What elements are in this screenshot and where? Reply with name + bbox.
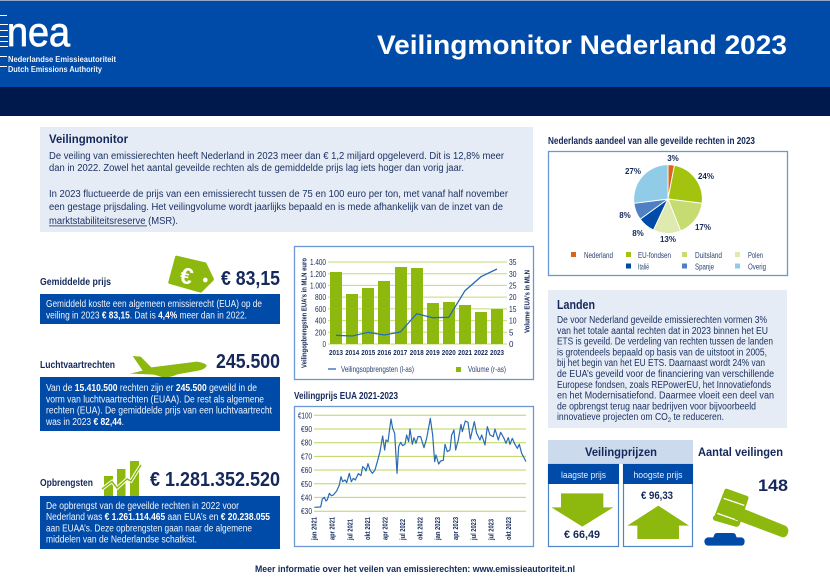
text box: Gemiddeld kostte een algemeen emissierecht (EUA) op de <box>46 299 262 310</box>
heading: Landen: Landen <box>557 298 595 312</box>
right axis labels: 30 <box>509 270 517 279</box>
text box: aan EUAA’s. Deze opbrengsten gaan naar de algemene <box>46 524 252 534</box>
pie legend: EU-fondsen <box>638 250 671 260</box>
pie legend: Overig <box>748 262 766 272</box>
Landen text: van het totale aantal rechten dat in 2023 binnen het EU <box>557 326 768 337</box>
Landen text: te reduceren. <box>671 412 724 423</box>
Landen text: de EUA’s geveild voor de financiering van verschillende <box>557 369 774 380</box>
text box: De opbrengst van de geveilde rechten in 2022 voor <box>46 501 240 512</box>
date labels: okt 2023 <box>506 517 513 540</box>
line chart: veilingprijs EUA: €50 <box>301 480 312 489</box>
year labels: 2015 <box>361 348 375 357</box>
year labels <box>329 348 504 357</box>
value: 148: 148 <box>758 476 788 495</box>
left axis labels: 800 <box>315 293 326 302</box>
Landen text: Europese fondsen, zoals REPowerEU, het Innovatiefonds <box>557 380 771 391</box>
left axis labels: 1.200 <box>310 270 326 279</box>
right axis labels: 15 <box>509 305 517 314</box>
Landen text: ETS is geveild. De verdeling van rechten tussen de landen <box>557 336 773 348</box>
line chart: veilingprijs EUA <box>294 406 534 546</box>
year labels: 2019 <box>426 348 440 357</box>
Landen text: innovatieve projecten om CO <box>557 412 686 423</box>
date labels: jul 2022 <box>400 519 407 541</box>
line chart: veilingprijs EUA: €80 <box>301 439 312 448</box>
year labels: 2014 <box>345 348 360 357</box>
text box <box>40 294 280 324</box>
right axis labels: 10 <box>509 316 517 326</box>
pie percentages <box>619 154 714 244</box>
date labels: apr 2021 <box>330 517 336 540</box>
intro text: een gestage prijsdaling. Het veilingvolume wordt jaarlijks bepaald en is mede afhankelijk van de inzet van de <box>49 202 503 213</box>
Landen text: en het Modernisatiefond. Daarmee vloeit een deel van <box>557 390 774 402</box>
left axis labels: 0 <box>322 340 326 349</box>
volume bars <box>330 267 503 344</box>
lowest price: € 66,49 <box>564 529 600 541</box>
line chart: veilingprijs EUA: €40 <box>301 494 312 502</box>
header banner <box>0 0 830 116</box>
card: laagste prijs <box>548 464 619 546</box>
icon: up arrow <box>627 506 689 539</box>
year labels: 2022 <box>474 348 488 357</box>
panel: Landen <box>548 290 787 428</box>
text box <box>40 496 280 549</box>
intro text <box>49 151 509 227</box>
icon: price tag <box>170 257 212 291</box>
right axis labels <box>509 258 517 349</box>
right axis labels: 25 <box>509 282 517 290</box>
value: € 1.281.352.520 <box>150 469 280 491</box>
pie percentages: 27% <box>625 167 641 176</box>
left axis labels: 200 <box>315 328 326 338</box>
text box: Nederland was € 1.261.114.465 aan EUA’s en € 20.238.055 <box>46 512 270 523</box>
pie percentages: 8% <box>632 229 644 238</box>
card: hoogste prijs <box>623 464 693 546</box>
right axis labels: 0 <box>509 340 514 349</box>
date labels: jul 2021 <box>348 519 354 541</box>
Landen text: De voor Nederland geveilde emissierechten vormen 3% <box>557 315 767 326</box>
pie legend: Polen <box>748 250 763 260</box>
bar and line chart: veilingopbrengsten and volume <box>294 246 534 380</box>
text box: veiling in 2023 € 83,15. Dat is 4,4% meer dan in 2022. <box>46 310 247 322</box>
pie percentages: 24% <box>698 172 714 181</box>
logo: NEa <box>0 9 116 74</box>
Landen text: 2 <box>668 417 671 424</box>
heading: Veilingprijs EUA: Veilingprijs EUA 2021-2023 <box>294 391 398 402</box>
panel: Veilingprijzen <box>548 440 693 546</box>
pie percentages: 8% <box>619 211 631 220</box>
text box <box>40 377 280 431</box>
right axis title: Volume EUA’s in MLN <box>522 270 532 333</box>
year labels: 2023 <box>490 348 504 357</box>
date labels: okt 2022 <box>418 517 424 540</box>
right axis labels: 35 <box>509 258 517 267</box>
value: 245.500 <box>216 351 280 373</box>
icon: down arrow <box>551 493 613 527</box>
right axis labels: 20 <box>509 293 517 302</box>
right axis labels: 5 <box>509 328 514 338</box>
pie chart: share of auctioned allowances <box>548 152 788 276</box>
text box: middelen van de Nederlandse schatkist. <box>46 534 197 546</box>
revenue line <box>336 269 497 336</box>
chart legend: Volume (r-as) <box>468 364 506 374</box>
line chart: veilingprijs EUA: €30 <box>301 507 312 516</box>
intro text: marktstabiliteitsreserve (MSR). <box>49 216 178 227</box>
line chart: veilingprijs EUA: €90 <box>301 425 312 434</box>
pie percentages: 3% <box>667 154 679 163</box>
heading: Aantal veilingen: Aantal veilingen <box>698 445 783 459</box>
year labels: 2018 <box>410 348 424 357</box>
title: Veilingmonitor Nederland 2023 <box>377 30 787 60</box>
Landen text: bij het begin van het EU ETS. Daarnaast wordt 24% van <box>557 358 765 369</box>
date labels <box>312 517 513 541</box>
year labels: 2017 <box>393 348 407 357</box>
year labels: 2016 <box>377 348 391 357</box>
pie legend: Italië <box>638 262 649 272</box>
panel: Luchtvaartrechten <box>40 351 280 431</box>
Landen text: is grotendeels bepaald op basis van de uitstoot in 2005, <box>557 348 767 358</box>
Landen text: de opbrengst terug naar bedrijven voor bijvoorbeeld <box>557 402 756 412</box>
chart legend <box>328 364 506 374</box>
highest price: € 96,33 <box>641 490 673 502</box>
label: Luchtvaartrechten <box>40 360 115 371</box>
heading: Veilingmonitor: Veilingmonitor <box>49 132 128 146</box>
label: Gemiddelde prijs <box>40 277 111 288</box>
year labels: 2020 <box>442 348 456 357</box>
date labels: jul 2023 <box>471 519 478 541</box>
line chart: veilingprijs EUA: €60 <box>301 466 312 475</box>
line chart: veilingprijs EUA: €100 <box>298 412 312 420</box>
heading: Nederlands aandeel: Nederlands aandeel van alle geveilde rechten in 2023 <box>548 136 755 147</box>
card: laagste prijs: laagste prijs <box>561 470 606 480</box>
logo: NEa: Dutch Emissions Authority <box>8 65 102 74</box>
icon: airplane <box>130 356 207 377</box>
left axis labels: 600 <box>315 305 326 314</box>
date labels: apr 2023 <box>453 517 460 540</box>
text box: was in 2023 € 82,44. <box>45 417 124 428</box>
line chart: veilingprijs EUA: €70 <box>301 452 312 462</box>
pie percentages: 17% <box>695 223 711 232</box>
text box: vorm van luchtvaartrechten (EUAA). De rest als algemene <box>46 394 264 406</box>
logo: NEa: nea <box>7 9 70 55</box>
label: Opbrengsten <box>40 478 93 489</box>
date labels: apr 2022 <box>382 517 390 540</box>
footer link text: Meer informatie over het veilen van emissierechten: www.emissieautoriteit.nl <box>255 564 575 575</box>
card: hoogste prijs: hoogste prijs <box>634 470 683 480</box>
year labels: 2013 <box>329 348 343 357</box>
panel: Aantal veilingen <box>698 445 788 546</box>
panel: Gemiddelde prijs <box>40 257 280 324</box>
date labels: jul 2023 <box>488 519 496 541</box>
icon: gavel <box>704 489 788 546</box>
icon: rising bars <box>102 461 141 496</box>
pie percentages: 13% <box>660 235 676 244</box>
chart legend: Veilingsopbrengsten (l-as) <box>341 364 414 374</box>
text box: Van de 15.410.500 rechten zijn er 245.500 geveild in de <box>46 383 257 394</box>
left axis labels: 400 <box>315 316 326 326</box>
date labels: jan 2023 <box>435 517 442 541</box>
panel: Veilingmonitor intro <box>40 127 533 232</box>
intro text: In 2023 fluctueerde de prijs van een emissierecht tussen de 75 en 100 euro per ton, met vanaf half november <box>49 189 509 200</box>
pie legend: Duitsland <box>695 250 722 260</box>
intro text: dan in 2022. Zowel het aantal geveilde rechten als de gemiddelde prijs lag iets hoger dan vorig jaar. <box>49 163 464 174</box>
pie legend <box>571 250 766 272</box>
icon: price tag: € <box>177 262 196 290</box>
left axis labels <box>310 258 326 349</box>
heading: Veilingprijzen: Veilingprijzen <box>585 445 657 459</box>
left axis labels: 1.000 <box>310 282 326 290</box>
left axis title: Veilingopbrengsten EUA’s in MLN euro <box>300 258 308 368</box>
date labels: jan 2021 <box>312 517 318 541</box>
date labels: okt 2021 <box>365 517 372 540</box>
left axis labels: 1.400 <box>310 258 326 267</box>
intro text: De veiling van emissierechten heeft Nederland in 2023 meer dan € 1,2 miljard opgeleverd. Dit is 12,8% meer <box>49 151 505 162</box>
text box: rechten (EUA). De gemiddelde prijs van een luchtvaartrecht <box>46 406 272 416</box>
price line <box>314 418 526 507</box>
Landen text <box>557 315 774 424</box>
year labels: 2021 <box>458 348 472 357</box>
panel: Opbrengsten <box>40 461 280 549</box>
pie legend: Spanje <box>695 262 714 272</box>
logo: NEa: Nederlandse Emissieautoriteit <box>8 55 116 64</box>
value: € 83,15 <box>221 268 280 290</box>
pie legend: Nederland <box>584 250 613 260</box>
